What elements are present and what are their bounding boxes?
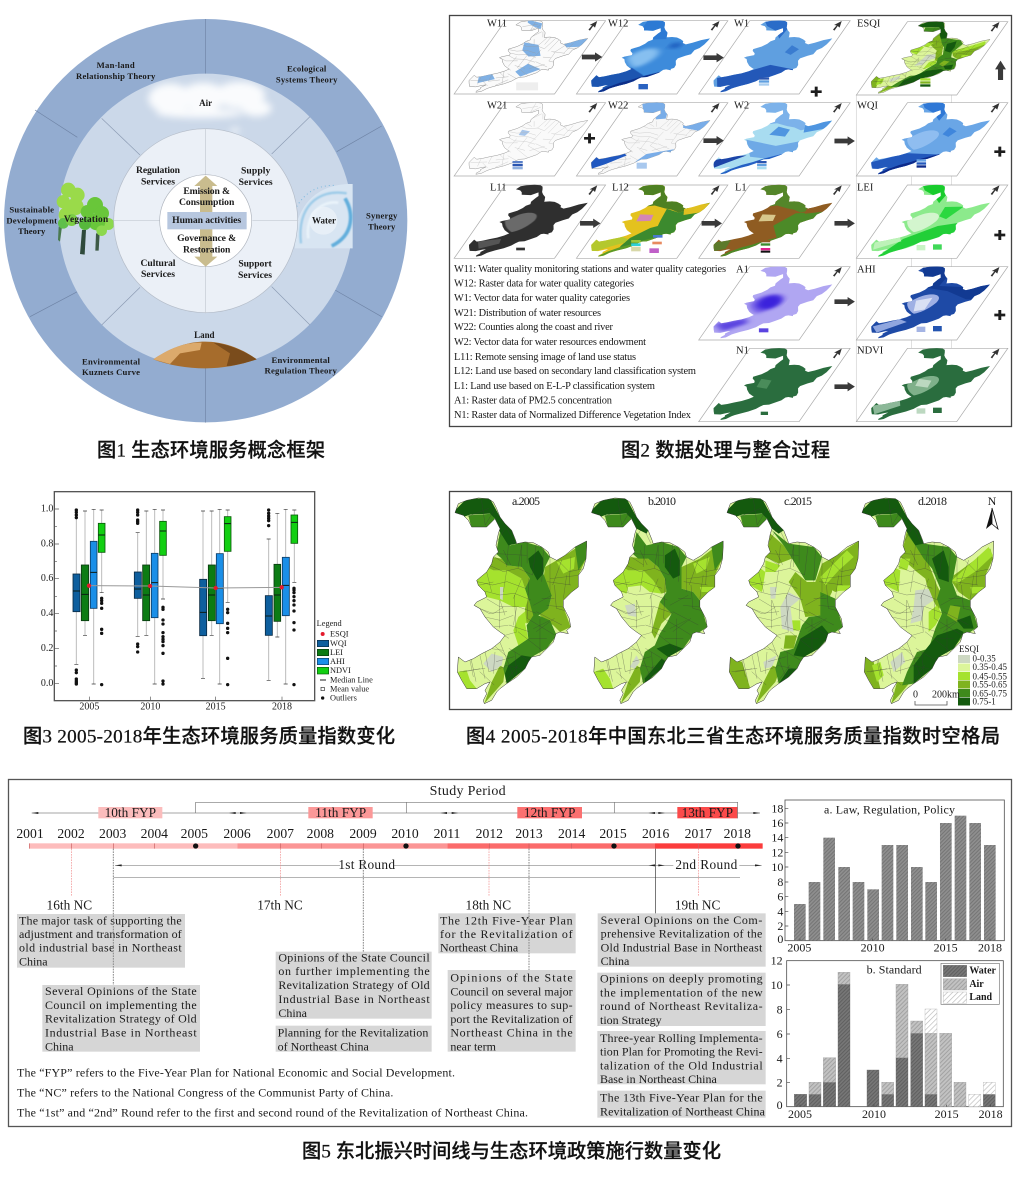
policy box: 12th plan: The 12th Five-Year Plan	[440, 913, 573, 927]
year labels: 2014	[558, 826, 585, 841]
whiskers	[76, 509, 294, 684]
policy box: state council measures: policy measures to sup-	[450, 998, 573, 1012]
icon: land mound	[153, 342, 257, 368]
policy box: 12th plan: Northeast China	[440, 941, 519, 955]
year labels: 2003	[99, 826, 126, 841]
map: NDVI	[856, 347, 1008, 423]
bar chart a: law regulation policy: 2	[777, 919, 783, 933]
land bars	[925, 1009, 995, 1107]
policy box: major task: The major task of supporting the	[19, 913, 182, 927]
legend: ESQI classes: ESQI	[959, 644, 979, 654]
congress labels	[47, 897, 721, 912]
study period bracket	[196, 784, 738, 818]
legend text block: W11: Water quality monitoring stations and water quality categories	[454, 264, 726, 275]
outer ring: theories: Kuznets Curve	[82, 367, 140, 377]
policy box: state council measures: Council on several major	[450, 984, 573, 998]
outer ring: theories: Environmental	[82, 356, 141, 366]
map: 2005	[453, 498, 587, 704]
caption: figure 5: 图5 东北振兴时间线与生态环境政策施行数量变化	[302, 1140, 721, 1162]
legend text block: A1: Raster data of PM2.5 concentration	[454, 396, 613, 406]
figure 3: box plot chart	[41, 492, 373, 712]
core: human activities: Consumption	[179, 197, 235, 208]
map labels: W12	[608, 18, 628, 30]
figure 2: data processing panel	[450, 16, 1012, 426]
map labels: L12	[612, 182, 629, 194]
policy box: state council measures: Opinions of the State	[450, 970, 573, 984]
bar chart a: law regulation policy: 10	[771, 860, 783, 874]
chart frame and axes: 2018	[272, 701, 292, 712]
outer ring: theories: Theory	[368, 221, 396, 231]
policy box: opinions 2009: Revitalization Strategy of Old	[278, 978, 430, 992]
arrow: emission and governance flow	[194, 176, 217, 267]
policy box: new round: Opinions on deeply promoting	[600, 972, 763, 986]
icon: north arrow: N	[988, 494, 997, 508]
core: human activities: Governance &	[177, 233, 236, 244]
inner ring: ecosystem services	[114, 128, 298, 313]
policy box: comprehensive revitalization: Several Opinions on the Com-	[601, 913, 762, 927]
policy box: 12th plan	[438, 913, 576, 955]
map labels: NDVI	[857, 346, 884, 356]
core: human activities: Human activities	[172, 215, 241, 226]
map: ESQI	[856, 21, 1008, 96]
policy box: several opinions 2003: China	[45, 1039, 74, 1053]
policy box: comprehensive revitalization: prehensive Revitalization of the	[601, 927, 762, 941]
policy box: planning	[276, 1025, 432, 1053]
chart frame and axes: 2015	[206, 701, 226, 712]
legend: Mean value	[330, 684, 369, 693]
legend text block: L11: Remote sensing image of land use status	[454, 352, 636, 363]
congress labels: 18th NC	[466, 897, 511, 912]
map titles: a.2005	[512, 494, 540, 508]
round spans: 2nd Round	[675, 857, 738, 872]
map labels: AHI	[857, 264, 876, 276]
legend	[317, 619, 373, 702]
legend: Outliers	[330, 693, 357, 702]
middle ring: air, vegetation, water, land: Land	[194, 330, 215, 340]
bar chart b: standard	[771, 954, 1003, 1121]
map: W21	[454, 102, 606, 177]
core: human activities: Emission &	[183, 186, 230, 197]
figure 4: spatial pattern maps	[450, 492, 1012, 710]
arrows and plus signs	[580, 52, 1006, 391]
map labels: W11	[487, 18, 507, 30]
policy box: major task	[17, 913, 185, 969]
map labels: L1	[735, 182, 747, 194]
legend text block: W21: Distribution of water resources	[454, 308, 601, 319]
legend: ESQI classes: 0.55-0.65	[972, 680, 1007, 690]
policy box: major task: old industrial base in Northeast	[19, 941, 182, 955]
policy box: opinions 2009: on further implementing the	[278, 964, 430, 978]
policy box: 12th plan: for the Revitalization of	[440, 927, 573, 941]
outer ring: theories: Relationship Theory	[76, 71, 156, 81]
policy box: state council measures: near term	[450, 1040, 497, 1054]
boxes: WQI	[73, 572, 272, 636]
policy box: 13th plan: The 13th Five-Year Plan for the	[600, 1091, 763, 1105]
figure 5: timeline panel	[8, 780, 1012, 1126]
policy box: three-year plan: talization of the Old Industrial	[600, 1058, 763, 1072]
FYP periods line: 12th FYP	[524, 805, 575, 820]
legend text block: N1: Raster data of Normalized Difference Vegetation Index	[454, 410, 692, 421]
legend text block: W22: Counties along the coast and river	[454, 322, 614, 333]
map labels: W2	[734, 100, 749, 112]
legend text block: W12: Raster data for water quality categories	[454, 278, 634, 290]
policy box: opinions 2009: China	[278, 1006, 308, 1020]
policy box: three-year plan	[597, 1031, 766, 1086]
middle ring: air, vegetation, water, land: Air	[199, 98, 212, 108]
legend: policy standards: Land	[969, 992, 993, 1003]
legend text block: W1: Vector data for water quality categories	[454, 293, 630, 304]
legend: ESQI classes: 0-0.35	[972, 654, 996, 664]
bar chart b: standard: 0	[777, 1098, 783, 1112]
map: N1	[699, 347, 850, 423]
round spans	[113, 857, 762, 877]
figure 1: conceptual framework diagram	[4, 19, 407, 423]
year labels: 2009	[349, 826, 377, 841]
legend: ESQI classes: 0.35-0.45	[972, 662, 1007, 672]
map: 2018	[860, 498, 994, 704]
bar chart b: standard: 6	[777, 1027, 783, 1041]
map labels: ESQI	[857, 18, 881, 30]
caption: figure 3: 图3 2005-2018年生态环境服务质量指数变化	[23, 726, 395, 748]
bar chart a: law regulation policy: 2010	[861, 941, 885, 955]
year labels: 2016	[642, 826, 669, 841]
chart frame and axes: 0.2	[41, 643, 53, 654]
map titles: d.2018	[918, 494, 947, 508]
map: A1	[699, 266, 850, 341]
bar chart a: law regulation policy: a. Law, Regulation, Policy	[824, 802, 955, 816]
bar chart a: law regulation policy: 6	[777, 890, 783, 904]
legend: AHI	[330, 657, 345, 666]
policy box: comprehensive revitalization: China	[601, 954, 630, 968]
policy box: state council measures	[448, 970, 576, 1054]
study period bracket: Study Period	[430, 784, 506, 799]
year labels: 2001	[16, 826, 44, 841]
icon: water splash	[295, 184, 353, 248]
legend text block: W2: Vector data for water resources endowment	[454, 337, 646, 348]
outer ring: theories	[4, 19, 407, 423]
year labels: 2005	[181, 826, 208, 841]
policy box: state council measures: Northeast China in the	[450, 1026, 573, 1040]
bar chart b: standard: 2015	[935, 1107, 959, 1121]
policy box: comprehensive revitalization	[598, 913, 766, 968]
map: LEI	[856, 183, 1008, 261]
policy box: opinions 2009: Opinions of the State Council	[278, 950, 430, 964]
chart frame and axes: 0.0	[41, 678, 53, 689]
chart frame and axes: 0.6	[41, 573, 53, 584]
legend: ESQI classes: 0.45-0.55	[972, 671, 1007, 681]
year labels: 2010	[391, 826, 419, 841]
middle ring: air, vegetation, water, land: Water	[312, 215, 336, 225]
map labels: W22	[608, 100, 628, 112]
outer ring: theories: Man-land	[97, 60, 135, 70]
FYP periods line: 13th FYP	[682, 805, 733, 820]
FYP periods line	[32, 805, 760, 820]
bar chart a: law regulation policy: 16	[771, 816, 783, 830]
map: 2015	[725, 498, 859, 704]
FYP periods line: 10th FYP	[105, 805, 156, 820]
outer ring: theories: Theory	[18, 226, 46, 236]
legend: ESQI	[330, 629, 349, 638]
legend: ESQI classes	[958, 644, 1007, 706]
policy box: comprehensive revitalization: Old Industrial Base in Northeast	[601, 940, 763, 954]
map: 2010	[590, 498, 723, 704]
outer ring: theories: Ecological	[287, 63, 327, 73]
bar chart b: standard: 2010	[862, 1107, 886, 1121]
year labels: 2006	[223, 826, 251, 841]
policy box: opinions 2009: Industrial Base in Northeast	[278, 992, 430, 1006]
policy box: planning: Planning for the Revitalization	[278, 1025, 428, 1039]
policy box: opinions 2009	[276, 950, 432, 1020]
bar chart b: standard: 2018	[979, 1107, 1003, 1121]
outer ring: theories: Regulation Theory	[264, 366, 338, 376]
year labels: 2013	[515, 826, 543, 841]
year labels: 2004	[141, 826, 168, 841]
median lines	[73, 522, 298, 616]
map labels: A1	[736, 264, 749, 276]
legend text block	[454, 264, 726, 421]
inner ring: ecosystem services: Services	[238, 270, 272, 281]
core: human activities	[160, 175, 252, 267]
year labels: 2011	[434, 826, 461, 841]
notes	[17, 1066, 528, 1120]
legend: policy standards: Water	[969, 965, 997, 976]
icon: north arrow	[986, 494, 998, 529]
caption: figure 2: 图2 数据处理与整合过程	[621, 440, 830, 462]
legend text block: L12: Land use based on secondary land classification system	[454, 366, 696, 377]
policy box: new round	[597, 972, 766, 1027]
outer ring: theories: Development	[6, 215, 57, 225]
legend text block: L1: Land use based on E-L-P classification system	[454, 381, 655, 392]
water bars	[794, 984, 995, 1107]
chart frame and axes: 2010	[140, 701, 160, 712]
policy box: several opinions 2003	[42, 984, 200, 1053]
bar chart b: standard: b. Standard	[867, 962, 922, 976]
bar chart b: standard: 2005	[788, 1107, 812, 1121]
outliers	[75, 508, 296, 686]
map: L12	[574, 179, 730, 260]
policy box: several opinions 2003: Revitalization Strategy of Old	[45, 1012, 197, 1026]
outer ring: theories: Synergy	[366, 211, 398, 221]
map labels: LEI	[857, 182, 874, 194]
boxes: AHI	[90, 541, 289, 624]
notes: The “1st” and “2nd” Round refer to the first and second round of the Revitalization of Northeast China.	[17, 1106, 528, 1120]
map titles	[512, 494, 947, 508]
inner ring: ecosystem services: Services	[141, 176, 175, 187]
map labels: N1	[736, 346, 749, 356]
bar chart a: law regulation policy	[771, 800, 1004, 955]
map labels	[487, 18, 884, 356]
map: AHI	[856, 265, 1008, 341]
policy box: state council measures: port the Revitalization of	[450, 1012, 573, 1026]
inner ring: ecosystem services: Cultural	[140, 258, 176, 269]
notes: The “NC” refers to the National Congress of the Communist Party of China.	[17, 1086, 393, 1100]
dashed connector lines	[71, 849, 698, 985]
bar chart a: law regulation policy: 18	[771, 801, 783, 815]
map: WQI	[856, 101, 1008, 179]
map labels: WQI	[857, 100, 878, 112]
legend: ESQI classes: 0.75-1	[972, 696, 996, 706]
legend: LEI	[330, 648, 343, 657]
year labels: 2008	[307, 826, 334, 841]
bar chart a: law regulation policy: 14	[771, 831, 783, 845]
bar chart a: law regulation policy: 4	[777, 904, 783, 918]
legend: ESQI classes: 0.65-0.75	[972, 688, 1007, 698]
inner ring: ecosystem services: Services	[141, 269, 175, 280]
air bars	[809, 972, 966, 1107]
year labels: 2018	[724, 826, 751, 841]
map: W12	[572, 18, 728, 98]
map labels: W1	[734, 18, 749, 30]
inner ring: ecosystem services: Services	[239, 177, 273, 188]
policy box: 13th plan: Revitalization of Northeast China	[600, 1105, 766, 1119]
congress labels: 16th NC	[47, 897, 92, 912]
policy box: three-year plan: Three-year Rolling Implementa-	[600, 1031, 763, 1045]
year labels: 2007	[267, 826, 294, 841]
year labels: 2017	[685, 826, 712, 841]
bar chart b: standard: 2	[777, 1076, 783, 1090]
policy box: major task: adjustment and transformation of	[19, 927, 182, 941]
outer ring: theories: Environmental	[271, 355, 330, 365]
policy box: new round: the implementation of the new	[600, 985, 763, 999]
outer ring: theories: Sustainable	[9, 204, 54, 214]
map: W11	[454, 19, 606, 95]
boxes: LEI	[81, 564, 281, 621]
bar chart b: standard: 12	[771, 954, 783, 968]
bar chart a: law regulation policy: 8	[777, 875, 783, 889]
chart frame and axes: 0.4	[41, 608, 53, 619]
map: W2	[696, 97, 850, 178]
scale bar: 200km	[932, 690, 960, 700]
bar chart b: standard: 10	[771, 978, 783, 992]
bar chart a: law regulation policy: 0	[777, 932, 783, 946]
year labels: 2015	[599, 826, 627, 841]
map grid: parallelogram layers	[454, 18, 1008, 423]
legend: NDVI	[330, 666, 351, 675]
year labels	[16, 826, 751, 841]
policy box: several opinions 2003: Several Opinions of the State	[45, 984, 197, 998]
inner ring: ecosystem services: Regulation	[136, 165, 181, 176]
boxes: NDVI	[98, 515, 298, 555]
map labels: W21	[487, 100, 507, 112]
legend: WQI	[330, 639, 347, 648]
timeline bar	[29, 843, 763, 849]
policy box: major task: China	[19, 955, 48, 969]
bar chart b: standard: 8	[777, 1002, 783, 1016]
icon: cloud	[148, 82, 272, 133]
chart frame and axes: 2005	[79, 701, 99, 712]
congress labels: 17th NC	[257, 897, 303, 912]
outer ring: theories: Systems Theory	[276, 74, 338, 84]
bar chart b: standard: 4	[777, 1051, 783, 1065]
bar chart a: law regulation policy: 12	[771, 845, 783, 859]
legend: policy standards: Air	[969, 979, 984, 990]
middle ring: air, vegetation, water, land	[57, 74, 353, 368]
bar chart a: law regulation policy: 2015	[934, 941, 958, 955]
year labels: 2012	[476, 826, 503, 841]
caption: figure 4: 图4 2005-2018年中国东北三省生态环境服务质量指数时空格局	[466, 726, 1000, 748]
legend: Legend	[317, 619, 342, 628]
legend: policy standards	[941, 963, 999, 1004]
map: W22	[576, 101, 728, 177]
map: W1	[699, 19, 850, 97]
policy box: planning: of Northeast China	[278, 1039, 370, 1053]
policy box: three-year plan: Base in Northeast China	[600, 1072, 717, 1086]
map: L1	[696, 179, 850, 260]
policy box: 13th plan	[597, 1091, 766, 1119]
chart frame and axes: 1.0	[41, 503, 53, 514]
chart frame and axes: 0.8	[41, 538, 53, 549]
notes: The “FYP” refers to the Five-Year Plan for National Economic and Social Development.	[17, 1066, 455, 1080]
policy box: several opinions 2003: Council on implementing the	[45, 998, 197, 1012]
policy box: new round: tion Strategy	[600, 1013, 662, 1027]
inner ring: ecosystem services: Support	[238, 258, 272, 269]
caption: figure 1: 图1 生态环境服务概念框架	[97, 438, 325, 462]
core: human activities: Restoration	[183, 244, 231, 255]
chart frame and axes	[41, 492, 315, 712]
map: L11	[454, 184, 606, 259]
year labels: 2002	[57, 826, 85, 841]
scale bar: 0	[913, 690, 918, 700]
middle ring: air, vegetation, water, land: Vegetation	[64, 215, 109, 225]
icon: trees	[57, 183, 114, 255]
map titles: b.2010	[648, 494, 676, 508]
bar chart a: law regulation policy: 2005	[787, 941, 811, 955]
FYP periods line: 11th FYP	[315, 805, 366, 820]
scale bar	[913, 690, 960, 705]
policy box: new round: round of Northeast Revitaliza-	[600, 999, 763, 1013]
inner ring: ecosystem services: Supply	[241, 165, 271, 176]
round spans: 1st Round	[338, 857, 395, 872]
legend: Median Line	[330, 675, 373, 684]
map titles: c.2015	[784, 494, 812, 508]
policy box: three-year plan: tion Plan for Promoting the Revi-	[600, 1045, 763, 1059]
ESQI mean line and points	[87, 583, 284, 590]
map labels: L11	[490, 182, 507, 194]
policy box: several opinions 2003: Industrial Base in Northeast	[45, 1026, 197, 1040]
bar chart a: law regulation policy: 2018	[978, 941, 1002, 955]
congress labels: 19th NC	[675, 897, 721, 912]
